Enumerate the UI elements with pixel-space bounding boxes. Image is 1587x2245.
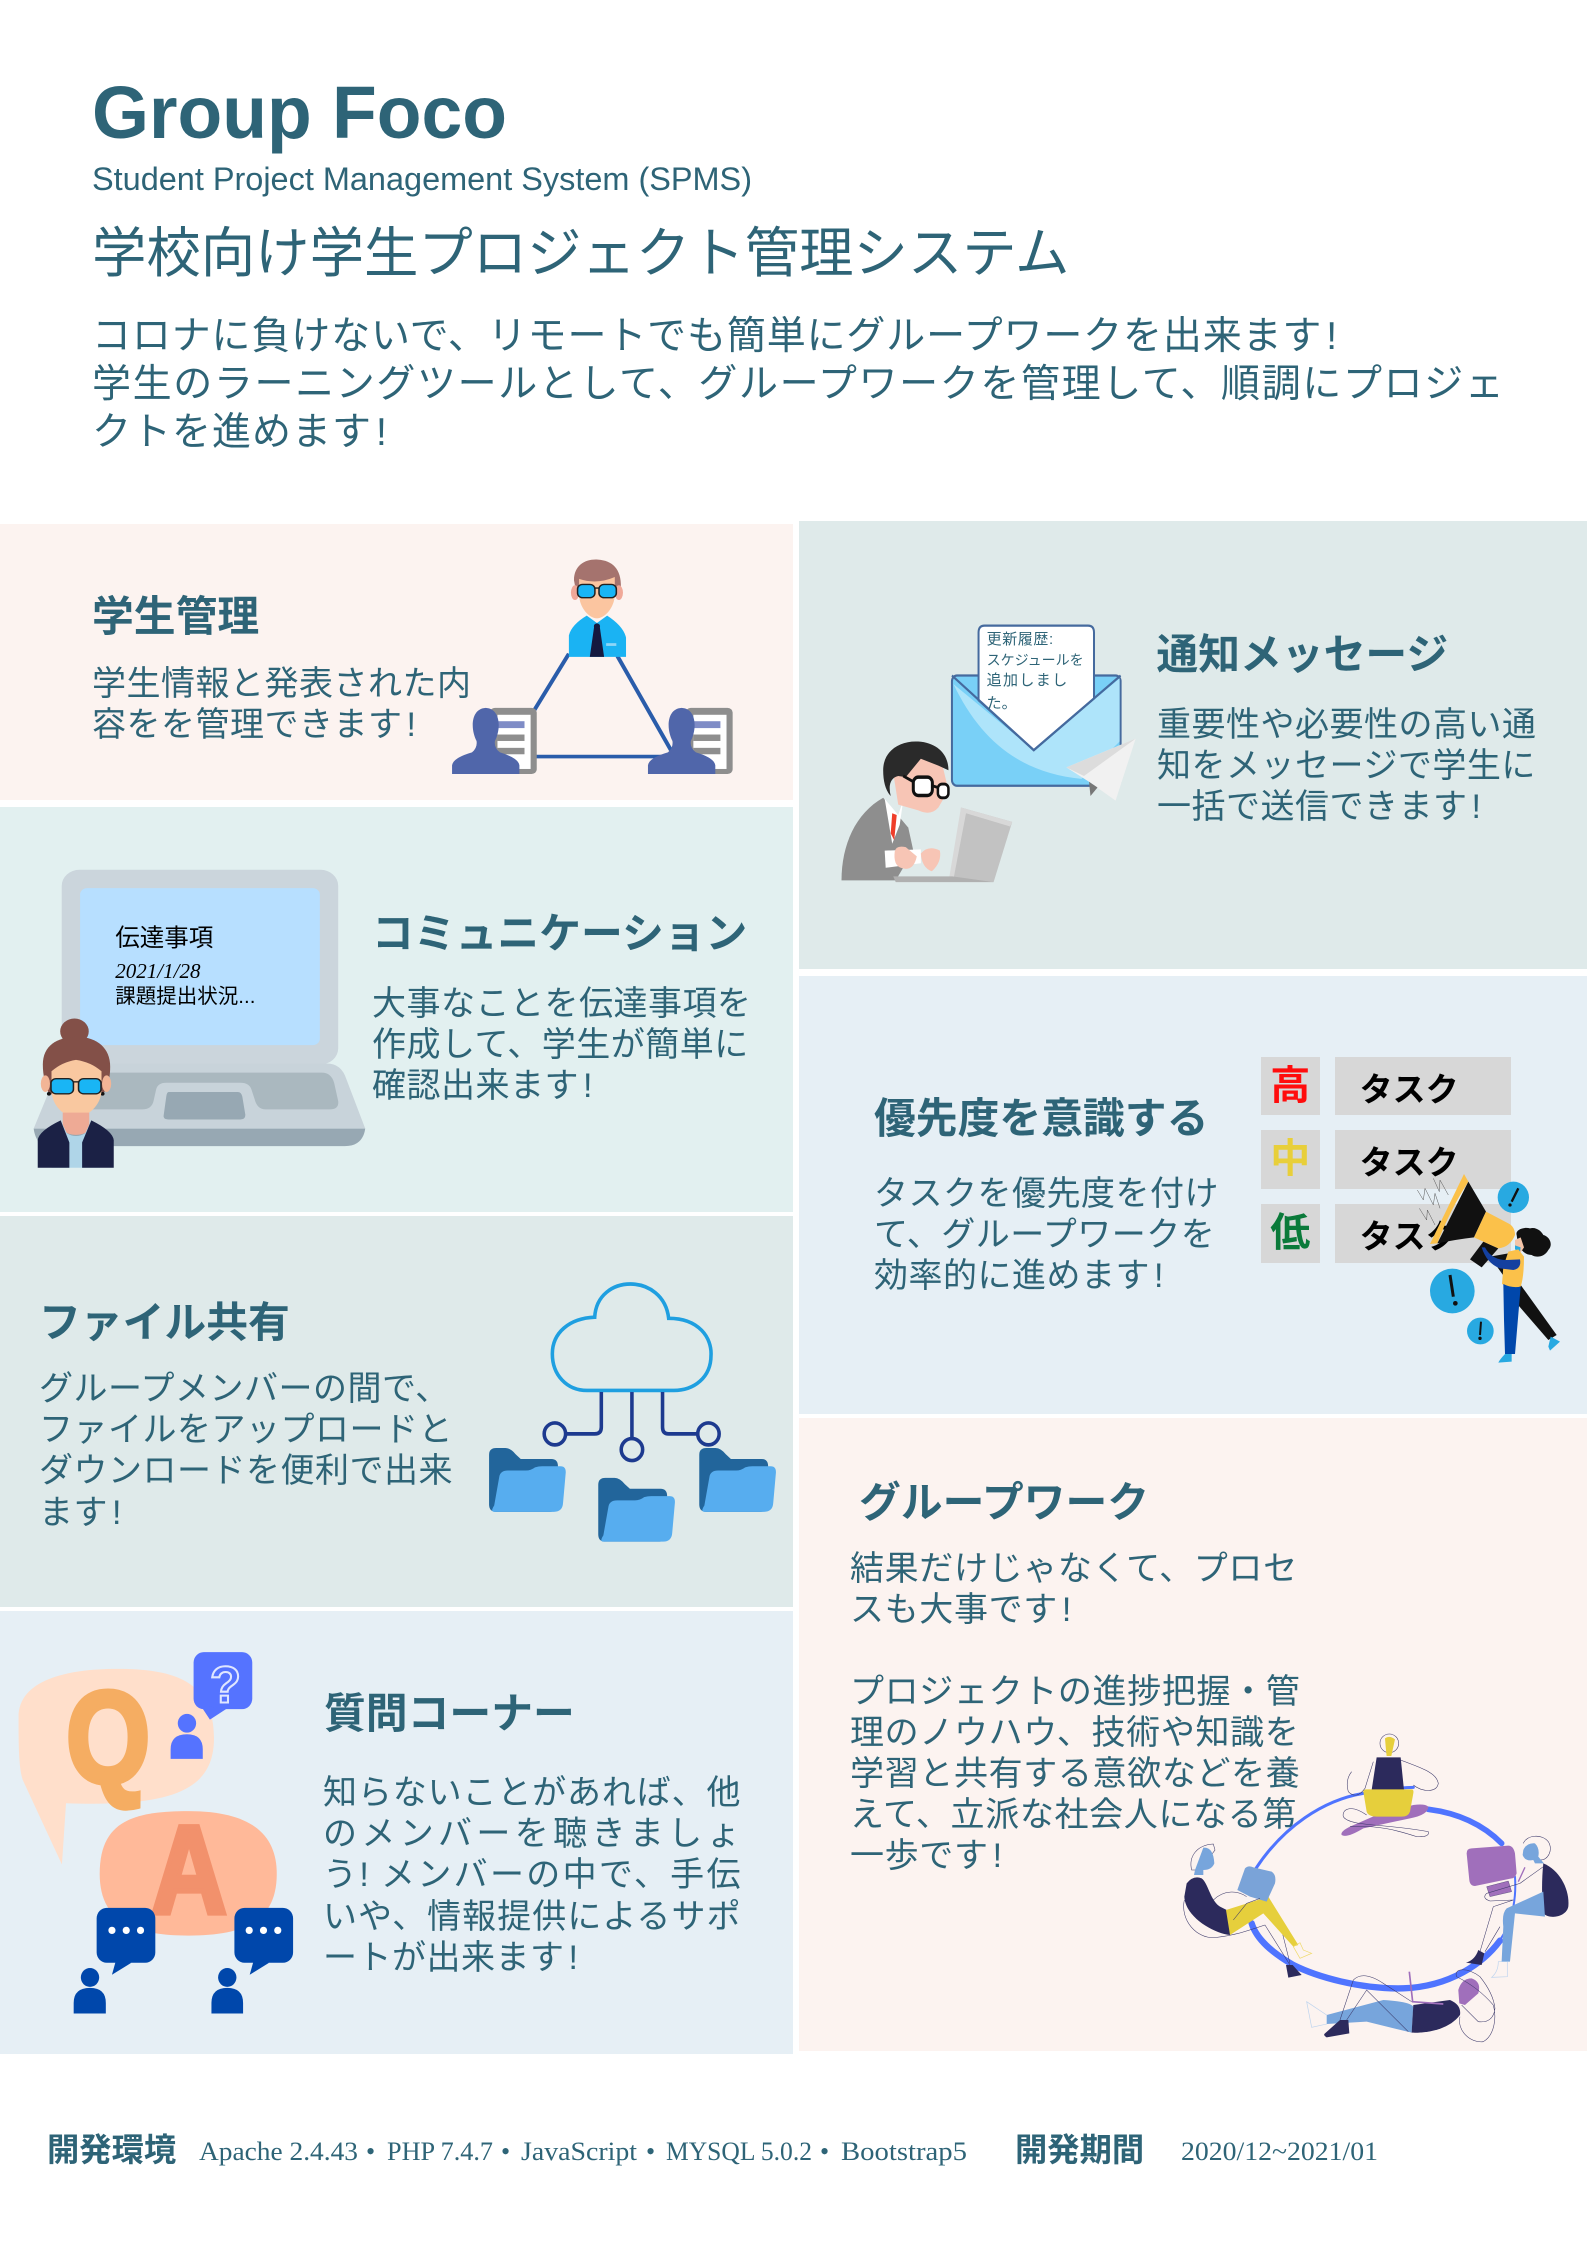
heading: student management: 学生管理	[92, 593, 259, 640]
text: group work: プロジェクトの進捗把握・管	[850, 1673, 1300, 1711]
heading: communication: コミュニケーション	[372, 910, 747, 957]
badge: medium: 中	[1270, 1137, 1310, 1181]
text: letter contents: スケジュールを	[987, 652, 1084, 668]
panel: student management	[0, 524, 793, 800]
footer text: tech stack: •	[366, 2137, 375, 2166]
text: notification messages: 知をメッセージで学生に	[1157, 747, 1536, 785]
text: group work: 一歩です!	[850, 1837, 1003, 1875]
text: file sharing	[39, 1370, 453, 1532]
text: letter contents: た。	[987, 695, 1017, 712]
text: question corner	[323, 1774, 741, 1977]
footer text: tech stack: •	[501, 2137, 510, 2166]
header: introduction text	[92, 315, 1505, 454]
text: communication: 大事なことを伝達事項を	[372, 985, 752, 1023]
panel: communication	[0, 807, 793, 1212]
text: group work: 理のノウハウ、技術や知識を	[850, 1714, 1299, 1752]
footer text: tech stack: PHP 7.4.7	[387, 2137, 493, 2166]
badge: low: 低	[1270, 1211, 1310, 1255]
heading: file sharing: ファイル共有	[39, 1299, 290, 1346]
text: question corner: いや、情報提供によるサポ	[323, 1898, 741, 1936]
text: notification messages	[1157, 706, 1536, 826]
text: group work: 結果だけじゃなくて、プロセ	[850, 1550, 1298, 1588]
text: group work	[850, 1550, 1300, 1875]
task row: medium: タスク	[1360, 1144, 1459, 1181]
footer: development environment and period	[47, 2132, 1378, 2168]
text: question corner: ートが出来ます!	[323, 1939, 578, 1977]
header: english subtitle: Student Project Management System (SPMS)	[92, 161, 752, 197]
text: student management: 容をを管理できます!	[92, 706, 416, 744]
text: group work: えて、立派な社会人になる第	[850, 1796, 1297, 1834]
heading: group work: グループワーク	[859, 1479, 1149, 1526]
badge: high: 高	[1270, 1064, 1310, 1108]
illustration: question and answer speech bubbles: ?	[210, 1655, 241, 1713]
heading: notification messages: 通知メッセージ	[1156, 631, 1448, 678]
person on bottom	[1327, 2000, 1413, 2033]
illustration: person with megaphone	[1417, 1174, 1560, 1363]
badge: high	[1261, 1057, 1320, 1115]
footer heading: environment: 開発環境	[47, 2132, 176, 2168]
text: announcement body: 課題提出状況...	[115, 985, 255, 1008]
footer text: tech stack: MYSQL 5.0.2	[666, 2137, 812, 2166]
text: group work: 学習と共有する意欲などを養	[850, 1755, 1300, 1793]
text: question corner: う! メンバーの中で、手伝	[323, 1856, 741, 1894]
task row: medium	[1335, 1130, 1511, 1189]
person on left	[1191, 1844, 1215, 1870]
task row: low	[1335, 1204, 1511, 1263]
panel: notification messages	[799, 521, 1587, 969]
text: priorities: タスクを優先度を付け	[874, 1175, 1219, 1213]
person on right	[1523, 1836, 1550, 1860]
footer text: tech stack	[199, 2137, 967, 2166]
panel: file sharing	[0, 1216, 793, 1607]
illustration: question and answer speech bubbles: Q	[66, 1665, 151, 1811]
task row: high	[1335, 1057, 1511, 1115]
illustration: laptop with announcement and woman	[34, 870, 366, 1168]
header: introduction text: コロナに負けないで、リモートでも簡単にグループワークを出来ます!	[92, 315, 1338, 358]
badge: low	[1261, 1204, 1320, 1263]
illustration: man sending an email	[842, 624, 1136, 882]
task row: low: タスク	[1360, 1218, 1459, 1255]
text: file sharing: ます!	[39, 1494, 122, 1532]
footer heading: period: 開発期間	[1015, 2132, 1144, 2168]
icon: cloud connected to folders	[489, 1282, 776, 1542]
header: japanese title: 学校向け学生プロジェクト管理システム	[92, 223, 1069, 284]
footer text: tech stack: JavaScript	[521, 2137, 638, 2166]
panel: question corner	[0, 1611, 793, 2054]
text: notification messages: 重要性や必要性の高い通	[1157, 706, 1536, 744]
text: communication: 作成して、学生が簡単に	[372, 1026, 749, 1064]
icon: teacher and two students in a triangle	[452, 560, 733, 774]
panel: group work	[799, 1418, 1587, 2051]
footer text: tech stack: Apache 2.4.43	[199, 2137, 358, 2166]
illustration: question and answer speech bubbles	[18, 1652, 294, 2014]
text: announcement date: 2021/1/28	[115, 959, 200, 983]
text: file sharing: ファイルをアップロードと	[39, 1411, 453, 1449]
text: group work: スも大事です!	[850, 1591, 1072, 1629]
text: communication: 確認出来ます!	[372, 1067, 593, 1105]
text: priorities	[874, 1175, 1219, 1295]
text: priorities: 効率的に進めます!	[874, 1257, 1164, 1295]
footer text: tech stack: •	[646, 2137, 655, 2166]
header: introduction text: クトを進めます!	[92, 411, 388, 454]
text: file sharing: グループメンバーの間で、	[39, 1370, 450, 1408]
text: question corner: 知らないことがあれば、他	[323, 1774, 741, 1812]
text: announcement title: 伝達事項	[115, 925, 213, 952]
header: brand name: Group Foco	[92, 71, 507, 154]
heading: question corner: 質問コーナー	[324, 1690, 575, 1737]
text: letter contents: 更新履歴:	[987, 631, 1054, 648]
header: introduction text: 学生のラーニングツールとして、グループワークを管理して、順調にプロジェ	[92, 363, 1505, 406]
text: priorities: て、グループワークを	[874, 1216, 1215, 1254]
text: communication	[372, 985, 752, 1105]
text: letter contents: 追加しまし	[987, 672, 1069, 689]
footer text: tech stack: Bootstrap5	[841, 2137, 967, 2166]
badge: medium	[1261, 1130, 1320, 1189]
illustration: question and answer speech bubbles: A	[152, 1801, 227, 1940]
footer text: period dates: 2020/12~2021/01	[1181, 2137, 1378, 2166]
text: question corner: のメンバーを聴きましょ	[323, 1815, 741, 1853]
footer text: tech stack: •	[820, 2137, 829, 2166]
text: student management	[92, 664, 472, 744]
illustration: four people working around a ring	[1183, 1734, 1568, 2042]
task row: high: タスク	[1360, 1071, 1459, 1108]
chart: priority task list	[1261, 1057, 1511, 1263]
text: notification messages: 一括で送信できます!	[1157, 788, 1481, 826]
person on top	[1380, 1734, 1399, 1753]
text: letter contents	[987, 631, 1084, 712]
text: student management: 学生情報と発表された内	[92, 664, 472, 702]
panel: priorities	[799, 976, 1587, 1414]
text: file sharing: ダウンロードを便利で出来	[39, 1452, 453, 1490]
heading: priorities: 優先度を意識する	[874, 1095, 1208, 1142]
